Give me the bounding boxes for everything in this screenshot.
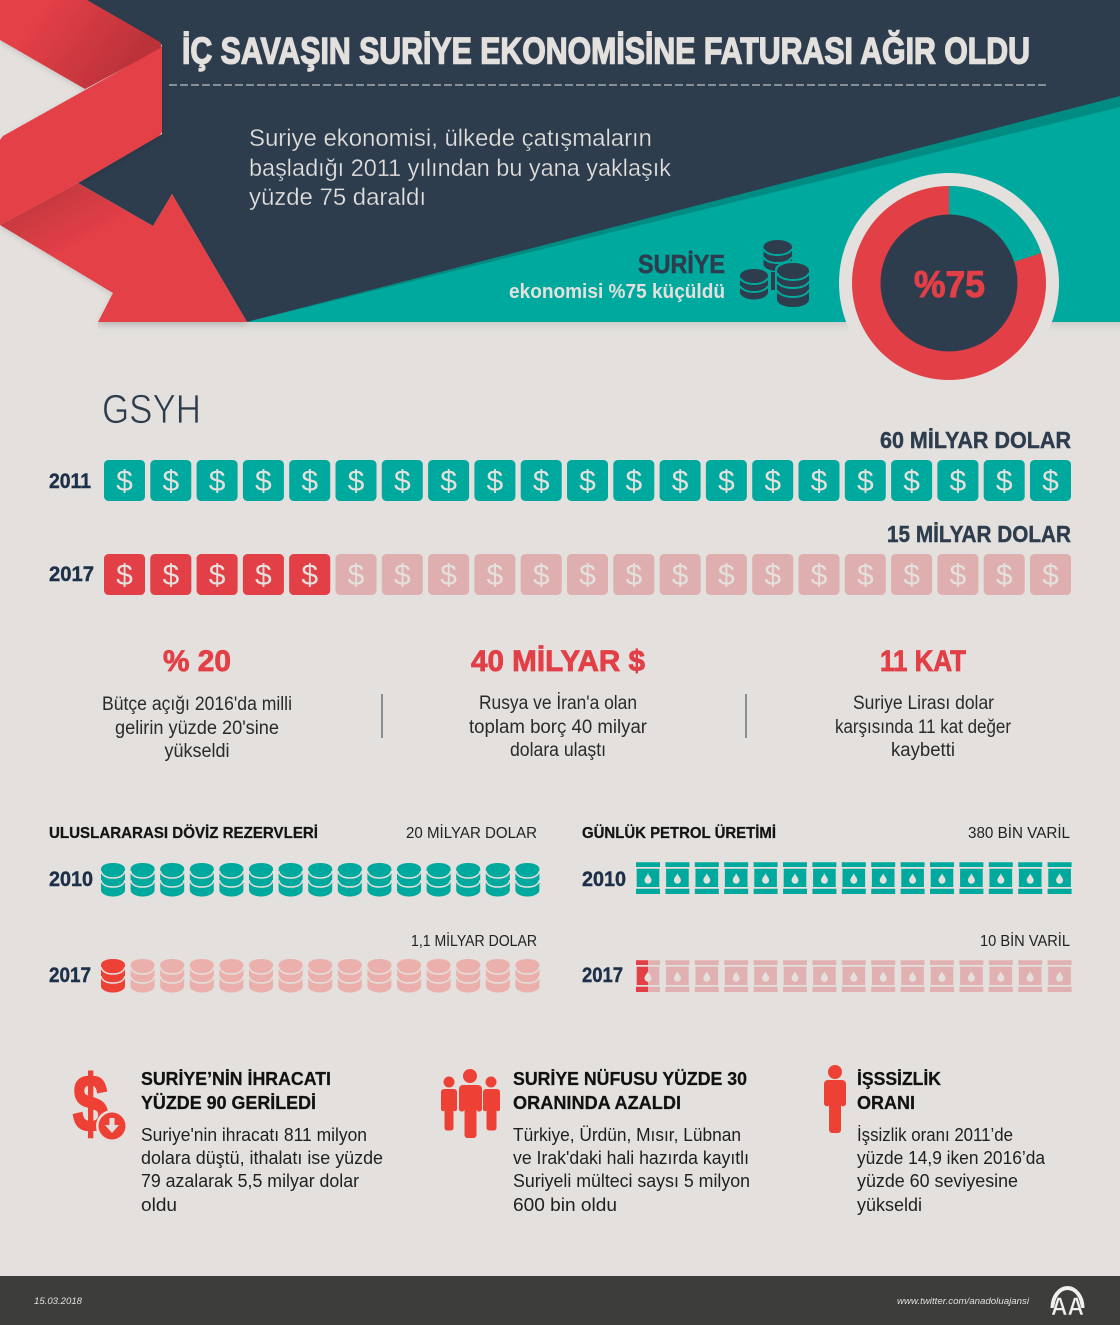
chart: foreign reserves: 20 MİLYAR DOLAR bbox=[406, 823, 537, 842]
icon: three people bbox=[441, 1069, 500, 1138]
stat: debt: dolara ulaştı bbox=[510, 740, 606, 761]
text block: exports: Suriye'nin ihracatı 811 milyon bbox=[141, 1124, 367, 1145]
chart: GSYH 2011: 60 MİLYAR DOLAR bbox=[880, 427, 1071, 453]
text block: unemployment: İşsizlik oranı 2011’de bbox=[857, 1124, 1013, 1145]
text block: unemployment: yükseldi bbox=[857, 1194, 922, 1215]
chart: oil production: 2010 bbox=[582, 868, 626, 891]
chart: GSYH 2017: 15 MİLYAR DOLAR bbox=[887, 521, 1071, 547]
footer: 15.03.2018 bbox=[34, 1296, 83, 1307]
donut chart: %75: %75 bbox=[914, 264, 985, 305]
dashed title rule bbox=[169, 84, 1049, 86]
stat: lira: 11 KAT bbox=[880, 645, 966, 678]
icon: dollar with down arrow: $ bbox=[73, 1059, 108, 1148]
text block: exports: 79 azalarak 5,5 milyar dolar bbox=[141, 1170, 359, 1191]
text block: population: ve Irak'daki hali hazırda kayıtlı bbox=[513, 1147, 749, 1168]
stat: debt: 40 MİLYAR $ bbox=[471, 645, 645, 678]
footer: www.twitter.com/anadoluajansi bbox=[897, 1296, 1030, 1307]
header background bbox=[78, 0, 1120, 331]
icon: AA logo: AA bbox=[1051, 1293, 1084, 1321]
stat: budget deficit: gelirin yüzde 20'sine bbox=[115, 718, 279, 739]
chart: foreign reserves: ULUSLARARASI DÖVİZ REZERVLERİ bbox=[49, 823, 318, 842]
callout: Suriye: SURİYE bbox=[638, 249, 725, 279]
chart: oil production: 2017 bbox=[582, 964, 623, 987]
stat: budget deficit: yükseldi bbox=[164, 741, 230, 762]
stat: debt bbox=[469, 645, 648, 761]
text block: unemployment: İŞSSİZLİK bbox=[857, 1069, 941, 1089]
chart: foreign reserves: 1,1 MİLYAR DOLAR bbox=[411, 931, 537, 950]
stat: debt: toplam borç 40 milyar bbox=[469, 717, 648, 738]
stat: lira: kaybetti bbox=[891, 740, 955, 761]
stat: debt: Rusya ve İran'a olan bbox=[479, 693, 637, 714]
text block: exports: YÜZDE 90 GERİLEDİ bbox=[141, 1093, 316, 1113]
stat: budget deficit bbox=[102, 645, 292, 762]
ribbon arrow bbox=[0, 0, 247, 322]
chart: GSYH 2017: $$$$$$$$$$$$$$$$$$$$$ bbox=[116, 559, 1059, 592]
footer bbox=[0, 1276, 1120, 1325]
chart: foreign reserves: 2017 bbox=[49, 964, 91, 987]
text block: exports bbox=[141, 1069, 383, 1215]
intro text: başladığı 2011 yılından bu yana yaklaşık bbox=[249, 155, 672, 182]
callout: Suriye bbox=[509, 249, 725, 303]
text block: exports: SURİYE’NİN İHRACATI bbox=[141, 1069, 331, 1089]
chart: oil production bbox=[582, 823, 1072, 992]
donut chart: %75 bbox=[839, 173, 1059, 393]
stat: lira: karşısında 11 kat değer bbox=[835, 717, 1012, 738]
chart: oil production: 10 BİN VARİL bbox=[980, 931, 1070, 950]
text block: population: SURİYE NÜFUSU YÜZDE 30 bbox=[513, 1069, 747, 1089]
intro text: yüzde 75 daraldı bbox=[249, 184, 426, 211]
icon: coin stacks bbox=[740, 240, 811, 309]
stat: budget deficit: Bütçe açığı 2016'da milli bbox=[102, 694, 292, 715]
text block: population: 600 bin oldu bbox=[513, 1194, 617, 1215]
callout: Suriye: ekonomisi %75 küçüldü bbox=[509, 281, 725, 303]
chart: GSYH 2011: 2011 bbox=[49, 470, 91, 493]
stat: lira: Suriye Lirası dolar bbox=[853, 693, 995, 714]
text block: unemployment: yüzde 14,9 iken 2016’da bbox=[857, 1147, 1046, 1168]
intro text: Suriye ekonomisi, ülkede çatışmaların bbox=[249, 125, 652, 152]
heading: GSYH: GSYH bbox=[102, 386, 201, 432]
chart: GSYH 2011 bbox=[49, 427, 1071, 501]
text block: unemployment: ORANI bbox=[857, 1093, 915, 1113]
text block: population: Türkiye, Ürdün, Mısır, Lübnan bbox=[513, 1124, 741, 1145]
stat: budget deficit: % 20 bbox=[163, 645, 231, 678]
text block: unemployment: yüzde 60 seviyesine bbox=[857, 1170, 1018, 1191]
text block: exports: oldu bbox=[141, 1194, 177, 1215]
chart: GSYH 2017 bbox=[49, 521, 1071, 595]
chart: oil production: 380 BİN VARİL bbox=[968, 823, 1070, 842]
text block: unemployment bbox=[857, 1069, 1046, 1215]
chart: oil production: GÜNLÜK PETROL ÜRETİMİ bbox=[582, 823, 776, 842]
intro text bbox=[249, 125, 672, 211]
text block: exports: dolara düştü, ithalatı ise yüzde bbox=[141, 1147, 383, 1168]
chart: foreign reserves: 2010 bbox=[49, 868, 93, 891]
icon: person bbox=[824, 1065, 846, 1133]
chart: foreign reserves bbox=[49, 823, 539, 992]
chart: GSYH 2011: $$$$$$$$$$$$$$$$$$$$$ bbox=[116, 465, 1059, 498]
text block: population bbox=[513, 1069, 750, 1215]
stat: lira bbox=[835, 645, 1012, 761]
text block: population: Suriyeli mülteci saysı 5 milyon bbox=[513, 1170, 750, 1191]
chart: GSYH 2017: 2017 bbox=[49, 563, 94, 586]
text block: population: ORANINDA AZALDI bbox=[513, 1093, 681, 1113]
